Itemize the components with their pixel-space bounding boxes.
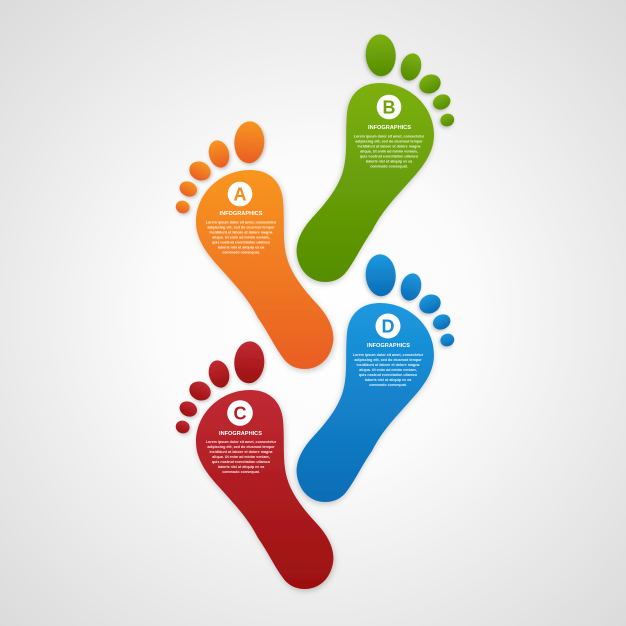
body text B: laboris nisi ut aliquip ex ea	[366, 160, 413, 164]
badge D: D	[382, 316, 394, 336]
body text A: laboris nisi ut aliquip ex ea	[218, 246, 265, 250]
foot shape D	[297, 303, 434, 502]
body text D: laboris nisi ut aliquip ex ea	[365, 378, 412, 382]
body text A	[206, 220, 277, 254]
foot shape A	[196, 170, 333, 369]
badge D	[376, 314, 400, 338]
body text A: aliqua. Ut enim ad minim veniam,	[212, 236, 270, 240]
toes B	[365, 34, 456, 128]
body text D	[353, 353, 424, 387]
body text D: quis nostrud exercitation ullamco	[359, 373, 418, 377]
body text C: adipiscing elit, sed do eiusmod tempor	[207, 445, 275, 449]
heading A: INFOGRAPHICS	[220, 211, 263, 217]
body text B: incididunt ut labore et dolore magna	[358, 144, 421, 148]
footprint B: green	[297, 34, 456, 282]
foot shape B	[297, 83, 434, 282]
foot shape C	[196, 390, 333, 589]
body text D: adipiscing elit, sed do eiusmod tempor	[354, 358, 422, 362]
body text D: Lorem ipsum dolor sit amet, consectetur	[353, 353, 424, 357]
body text B: commodo consequat.	[370, 164, 408, 168]
body text C: laboris nisi ut aliquip ex ea	[218, 465, 265, 469]
body text B: aliqua. Ut enim ad minim veniam,	[360, 150, 418, 154]
badge C	[227, 400, 253, 426]
badge B: B	[382, 98, 396, 118]
toes A	[174, 121, 265, 215]
body text C: incididunt ut labore et dolore magna	[210, 450, 273, 454]
badge A	[228, 182, 252, 206]
badge C: C	[234, 404, 246, 424]
heading C: INFOGRAPHICS	[219, 431, 262, 437]
body text B: quis nostrud exercitation ullamco	[360, 154, 419, 158]
body text C: aliqua. Ut enim ad minim veniam,	[212, 455, 270, 459]
heading B: INFOGRAPHICS	[368, 125, 411, 131]
body text A: incididunt ut labore et dolore magna	[210, 230, 273, 234]
body text C: Lorem ipsum dolor sit amet, consectetur	[206, 440, 277, 444]
body text C	[206, 440, 277, 474]
footprint A: orange	[174, 121, 333, 369]
footprint D: blue	[297, 254, 456, 502]
body text B: adipiscing elit, sed do eiusmod tempor	[355, 140, 423, 144]
body text C: commodo consequat.	[222, 470, 260, 474]
body text B: Lorem ipsum dolor sit amet, consectetur	[354, 134, 425, 138]
badge B	[377, 95, 401, 119]
body text D: aliqua. Ut enim ad minim veniam,	[359, 368, 417, 372]
body text A: quis nostrud exercitation ullamco	[212, 240, 271, 244]
body text A: Lorem ipsum dolor sit amet, consectetur	[206, 220, 277, 224]
toes C	[174, 341, 265, 435]
toes D	[365, 254, 456, 348]
body text A: adipiscing elit, sed do eiusmod tempor	[207, 226, 275, 230]
body text B	[354, 134, 425, 168]
footprint C: red	[174, 341, 333, 589]
body text D: incididunt ut labore et dolore magna	[357, 363, 420, 367]
body text D: commodo consequat.	[369, 383, 407, 387]
body text C: quis nostrud exercitation ullamco	[212, 460, 271, 464]
heading D: INFOGRAPHICS	[367, 343, 410, 349]
badge A: A	[234, 184, 246, 204]
body text A: commodo consequat.	[222, 250, 260, 254]
